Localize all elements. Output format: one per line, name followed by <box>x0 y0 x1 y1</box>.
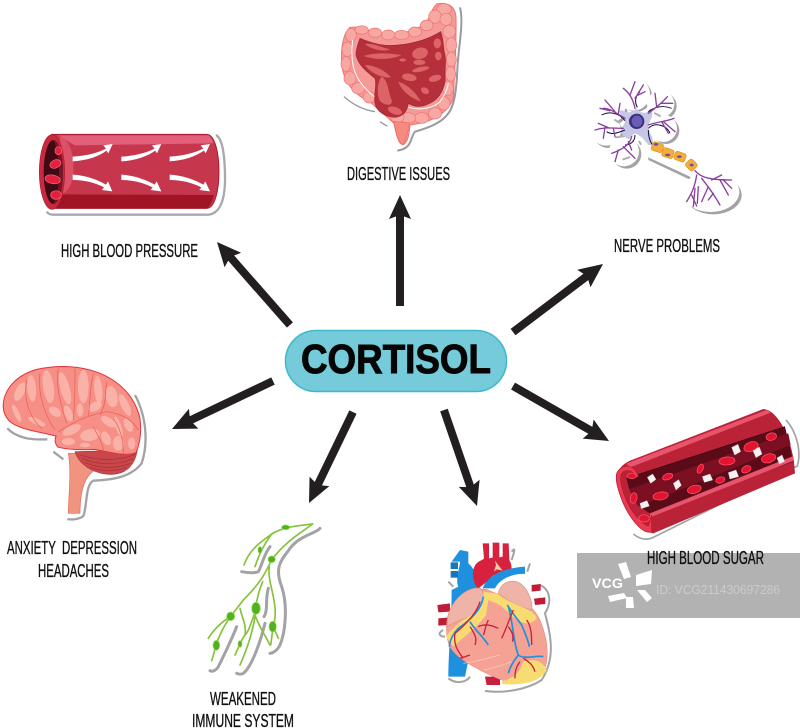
watermark id: ID: VCG211430697286 <box>656 582 780 597</box>
label: weakened immune system <box>192 689 294 728</box>
watermark logo: VCG <box>592 575 623 591</box>
icon: intestines <box>341 3 461 151</box>
icon: brain <box>3 366 146 519</box>
central cortisol pill <box>286 330 506 392</box>
arrow to nerve problems <box>506 255 610 341</box>
icon: blood vessel with high pressure arrows <box>39 134 225 215</box>
label: weakened immune system: WEAKENED <box>210 689 276 709</box>
label: anxiety depression headaches: ANXIETY DEPRESSION <box>7 538 137 558</box>
arrow to digestive issues <box>389 195 411 306</box>
label: high blood pressure: HIGH BLOOD PRESSURE <box>61 241 198 261</box>
arrow to high blood pressure <box>209 235 298 332</box>
watermark logo <box>592 562 652 608</box>
watermark band <box>577 553 800 618</box>
arrow to heart <box>434 406 487 510</box>
label: anxiety depression headaches: HEADACHES <box>38 561 109 581</box>
arrow to brain <box>167 371 278 439</box>
arrow to immune system <box>299 407 363 508</box>
label: nerve problems: NERVE PROBLEMS <box>614 236 720 256</box>
icon: blood vessel with sugar cubes <box>616 409 799 539</box>
label: digestive issues: DIGESTIVE ISSUES <box>347 164 450 184</box>
icon: heart <box>437 543 551 692</box>
icon: lymphatic vessels <box>208 524 320 674</box>
central cortisol pill: CORTISOL <box>301 336 491 382</box>
label: anxiety depression headaches <box>7 538 137 581</box>
icon: neuron <box>591 77 742 214</box>
arrow to high blood sugar <box>508 376 614 451</box>
